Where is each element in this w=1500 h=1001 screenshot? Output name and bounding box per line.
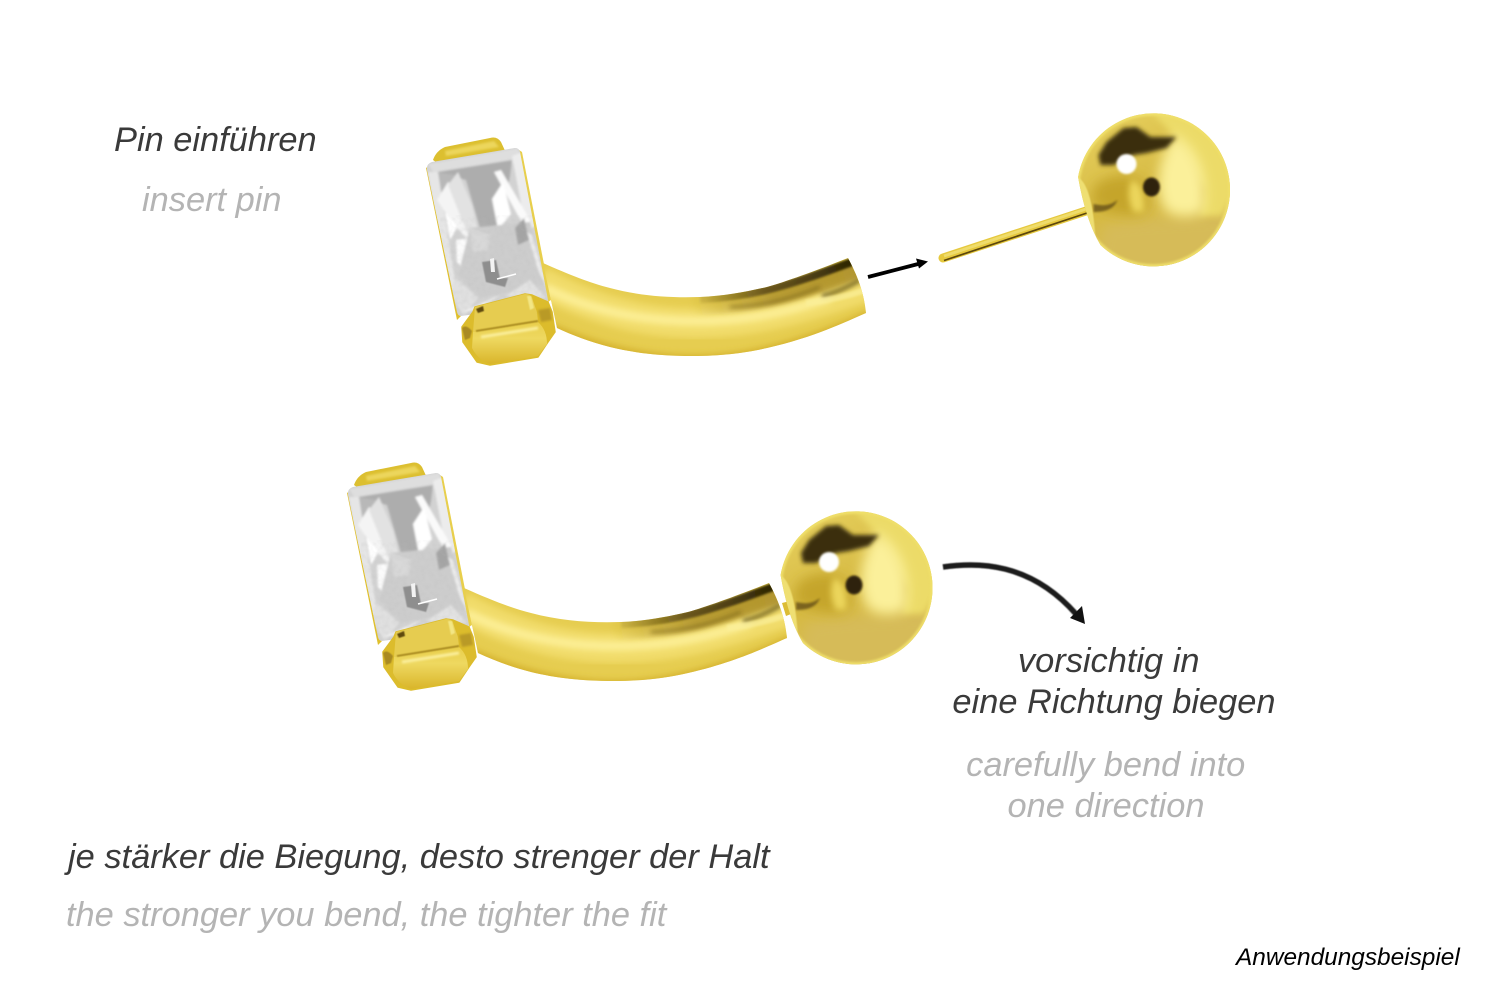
arrow: pull pin out (868, 258, 928, 277)
text: stronger bend note (English): the stronger you bend, the tighter the fit (66, 896, 668, 934)
text: bend instruction (English): one direction (1008, 787, 1204, 825)
illustration: ball with pin (943, 112, 1234, 280)
heading: insert pin (German): Pin einführen (114, 121, 317, 159)
caption: application example: Anwendungsbeispiel (1234, 944, 1460, 971)
text: bend instruction (German): eine Richtung biegen (952, 683, 1276, 721)
text: bend instruction (German): vorsichtig in (1018, 642, 1200, 680)
illustration: barbell without ball (426, 138, 870, 365)
text: stronger bend note (German): je stärker die Biegung, desto strenger der Halt (64, 838, 771, 876)
heading: insert pin (English): insert pin (142, 181, 282, 219)
text: bend instruction (English): carefully bend into (966, 746, 1245, 784)
illustration: assembled barbell with ball (347, 462, 936, 690)
arrow: bend direction (943, 565, 1085, 624)
